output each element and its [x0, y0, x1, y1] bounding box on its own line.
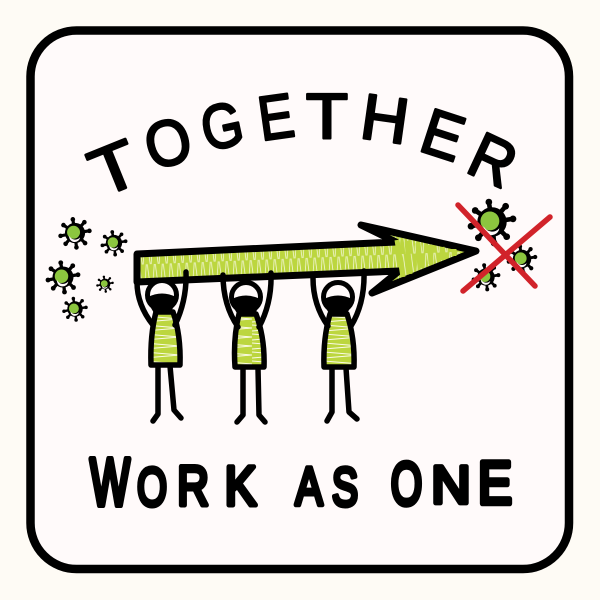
slogan: WORK AS ONE: K: [225, 455, 256, 517]
slogan: WORK AS ONE: W: [90, 445, 130, 519]
heading: TOGETHER: G: [195, 89, 249, 165]
red cross: [458, 205, 550, 291]
slogan: WORK AS ONE: O: [391, 450, 422, 517]
heading: TOGETHER: [79, 80, 527, 211]
heading: TOGETHER: R: [458, 119, 527, 202]
right virus cluster: [468, 199, 537, 291]
left virus cluster: [46, 217, 127, 322]
slogan: WORK AS ONE: A: [295, 458, 323, 517]
slogan: WORK AS ONE: E: [478, 450, 512, 516]
slogan: WORK AS ONE: N: [431, 456, 471, 515]
slogan: WORK AS ONE: O: [137, 457, 167, 517]
heading: TOGETHER: T: [306, 81, 348, 152]
heading: TOGETHER: O: [137, 103, 199, 183]
arrow: [137, 225, 476, 293]
slogan: WORK AS ONE: [90, 445, 512, 519]
figure 3: [313, 271, 364, 421]
slogan: WORK AS ONE: S: [332, 456, 358, 517]
figure 1: [137, 272, 186, 421]
slogan: WORK AS ONE: R: [177, 455, 209, 517]
figure 2: [223, 273, 271, 422]
heading: TOGETHER: T: [79, 125, 149, 211]
heading: TOGETHER: E: [254, 81, 298, 155]
heading: TOGETHER: E: [413, 96, 473, 176]
heading: TOGETHER: H: [357, 80, 413, 158]
